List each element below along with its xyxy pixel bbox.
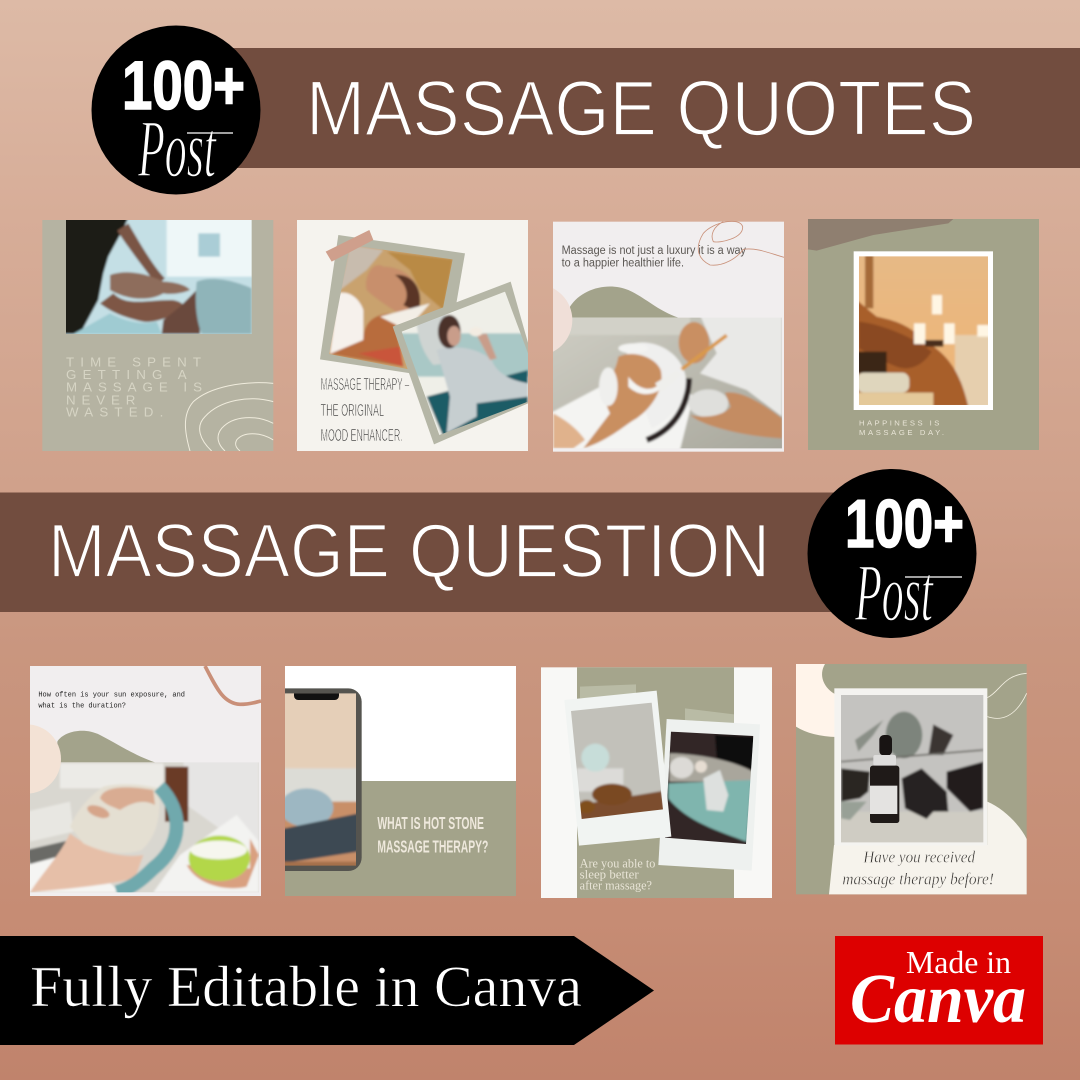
quote text <box>66 355 202 420</box>
badge: 100+ post middle: Post <box>854 547 934 638</box>
panel: happier healthier life quote <box>553 221 784 452</box>
white blob <box>829 802 1027 894</box>
photo frame: woman in robe <box>393 282 543 444</box>
cream blob <box>796 664 837 737</box>
panel: massage therapy before question <box>796 664 1027 894</box>
panel: sun exposure question <box>30 666 261 896</box>
dropper bottle <box>870 735 899 823</box>
caption: HAPPINESS IS <box>859 419 939 428</box>
caption: MASSAGE DAY. <box>859 428 944 437</box>
contour line art <box>185 383 273 451</box>
quote text <box>562 243 746 270</box>
panel: hot stone question <box>280 666 516 896</box>
badge: 100+ post top: Post <box>137 103 217 194</box>
tape pieces <box>580 684 734 723</box>
panel: time spent quote <box>42 217 273 451</box>
question text <box>842 847 994 888</box>
arrow banner: fully editable <box>0 936 654 1045</box>
question text: How often is your sun exposure, and <box>38 692 185 700</box>
torn paper strip <box>808 219 953 251</box>
arrow banner: fully editable: Fully Editable in Canva <box>30 954 582 1019</box>
pink circle <box>553 288 572 352</box>
question text: WHAT IS HOT STONE <box>377 813 484 833</box>
question text: after massage? <box>580 879 652 893</box>
question text: sleep better <box>580 867 639 881</box>
quote text: Massage is not just a luxury it is a way <box>562 243 746 257</box>
heading: massage question: MASSAGE QUESTION <box>48 509 770 594</box>
white photo frame <box>854 251 993 410</box>
badge: 100+ post middle <box>808 469 976 638</box>
photo: massage therapist <box>63 217 257 337</box>
caption <box>859 419 944 437</box>
badge: made in canva <box>835 936 1043 1044</box>
question text: massage therapy before! <box>842 869 994 888</box>
brown curve <box>205 666 261 704</box>
quote text: to a happier healthier life. <box>562 256 684 270</box>
photo: clay mask <box>27 760 263 895</box>
thin line art <box>987 673 1027 718</box>
badge: made in canva: Made in <box>906 944 1011 980</box>
question text: MASSAGE THERAPY? <box>377 836 488 856</box>
quote text: MOOD ENHANCER. <box>321 425 403 445</box>
tape <box>326 230 373 262</box>
banner: massage quotes <box>200 48 1080 168</box>
quote text: NEVER <box>66 392 135 407</box>
photo: facial mask <box>550 315 783 452</box>
question text: Have you received <box>862 847 976 866</box>
thin line art <box>698 221 784 265</box>
quote text <box>321 374 410 445</box>
photo: candle massage <box>857 253 991 407</box>
quote text: MASSAGE IS <box>66 380 202 395</box>
cream circle <box>30 724 61 794</box>
badge: 100+ post top <box>92 26 260 194</box>
badge: 100+ post middle: 100+ <box>845 486 964 562</box>
panel: mood enhancer quote <box>297 220 543 451</box>
phone mockup <box>280 688 362 871</box>
quote text: WASTED. <box>66 405 163 420</box>
photo frame: facial massage <box>320 235 465 378</box>
question text <box>377 813 488 856</box>
question text: what is the duration? <box>38 703 126 711</box>
quote text: THE ORIGINAL <box>321 400 384 420</box>
question text: Are you able to <box>580 857 655 871</box>
heading: massage quotes: MASSAGE QUOTES <box>306 64 976 152</box>
quote text: TIME SPENT <box>66 355 201 370</box>
quote text: GETTING A <box>66 367 187 382</box>
question text <box>38 692 185 711</box>
badge: 100+ post top: 100+ <box>122 47 245 124</box>
polaroid <box>834 688 987 846</box>
panel: sleep better question <box>541 667 772 898</box>
polaroid: bathtub <box>658 719 760 871</box>
polaroid: bath bomb <box>564 691 671 846</box>
panel: happiness is massage day <box>808 219 1039 450</box>
sage hill <box>57 731 155 762</box>
question text <box>580 857 655 893</box>
banner: massage question <box>0 492 840 612</box>
panel: mood enhancer quote: MASSAGE THERAPY – <box>321 374 410 394</box>
sage hill <box>570 286 678 318</box>
badge: made in canva: Canva <box>850 961 1026 1038</box>
